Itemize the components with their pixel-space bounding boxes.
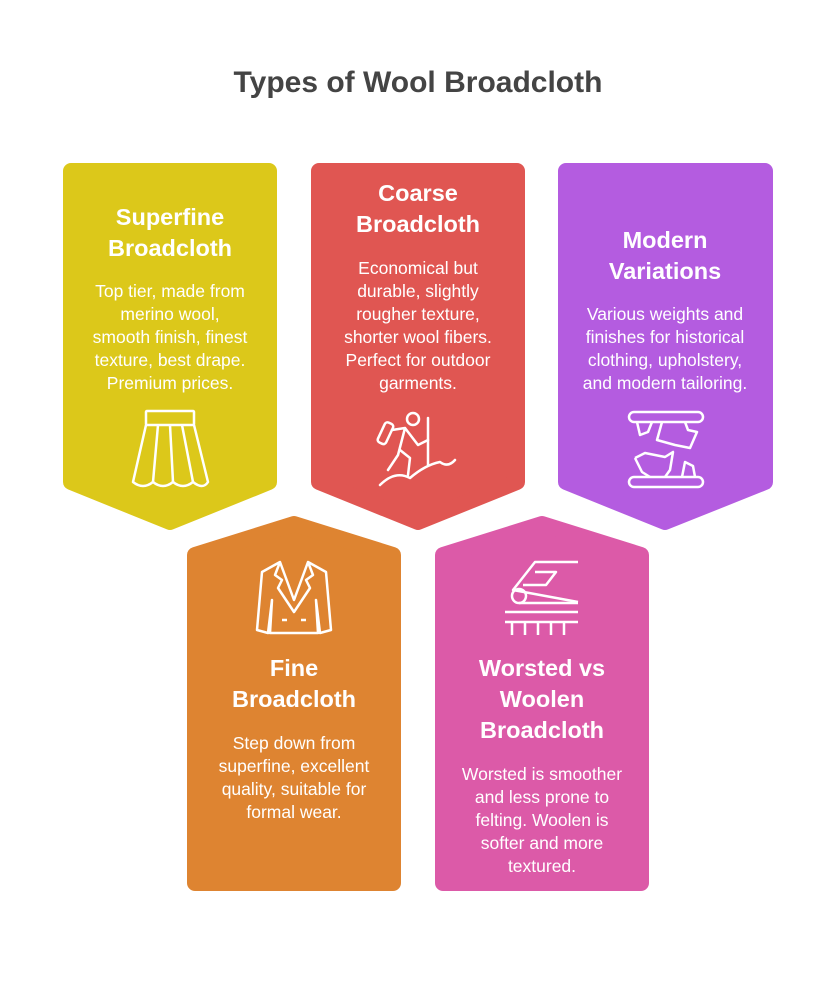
panel: coarse	[319, 171, 517, 522]
heading: coarse: Broadcloth	[356, 211, 480, 237]
text: coarse: Economical but	[358, 258, 478, 278]
icon: roller	[505, 562, 578, 635]
text: coarse: rougher texture,	[356, 304, 480, 324]
text: worsted: felting. Woolen is	[476, 810, 609, 830]
icon: jacket	[257, 562, 331, 633]
text: modern: finishes for historical	[586, 327, 744, 347]
text: worsted: and less prone to	[475, 787, 609, 807]
heading: modern: Modern	[623, 227, 707, 253]
text: coarse: garments.	[379, 373, 457, 393]
text: superfine: smooth finish, finest	[93, 327, 247, 347]
title: Types of Wool Broadcloth	[234, 66, 602, 99]
text: coarse: Perfect for outdoor	[346, 350, 491, 370]
heading: worsted: Woolen	[500, 686, 584, 712]
panel: superfine	[71, 171, 269, 522]
heading: worsted: Worsted vs	[479, 655, 605, 681]
heading: worsted: Broadcloth	[480, 717, 604, 743]
text: superfine: merino wool,	[120, 304, 220, 324]
text: superfine: Top tier, made from	[95, 281, 245, 301]
heading: modern: Variations	[609, 258, 721, 284]
text: coarse: durable, slightly	[357, 281, 479, 301]
panel: modern	[566, 171, 765, 522]
text: superfine: texture, best drape.	[95, 350, 245, 370]
heading: fine: Fine	[270, 655, 318, 681]
text: modern: clothing, upholstery,	[588, 350, 742, 370]
text: coarse: shorter wool fibers.	[344, 327, 492, 347]
heading: fine: Broadcloth	[232, 686, 356, 712]
text: fine: superfine, excellent	[219, 756, 370, 776]
panel: worsted vs woolen	[443, 524, 641, 883]
heading: superfine: Broadcloth	[108, 235, 232, 261]
heading: superfine: Superfine	[116, 204, 224, 230]
text: fine: Step down from	[233, 733, 355, 753]
text: worsted: softer and more	[481, 833, 603, 853]
text: worsted: Worsted is smoother	[462, 764, 622, 784]
panel: fine	[195, 524, 393, 883]
text: superfine: Premium prices.	[107, 373, 233, 393]
icon: hiker	[377, 413, 455, 485]
text: fine: quality, suitable for	[222, 779, 366, 799]
text: fine: formal wear.	[246, 802, 342, 822]
heading: coarse: Coarse	[378, 180, 458, 206]
text: worsted: textured.	[508, 856, 576, 876]
icon: skirt	[133, 411, 208, 486]
text: modern: Various weights and	[587, 304, 743, 324]
icon: fabric press	[629, 412, 703, 487]
text: modern: and modern tailoring.	[583, 373, 747, 393]
